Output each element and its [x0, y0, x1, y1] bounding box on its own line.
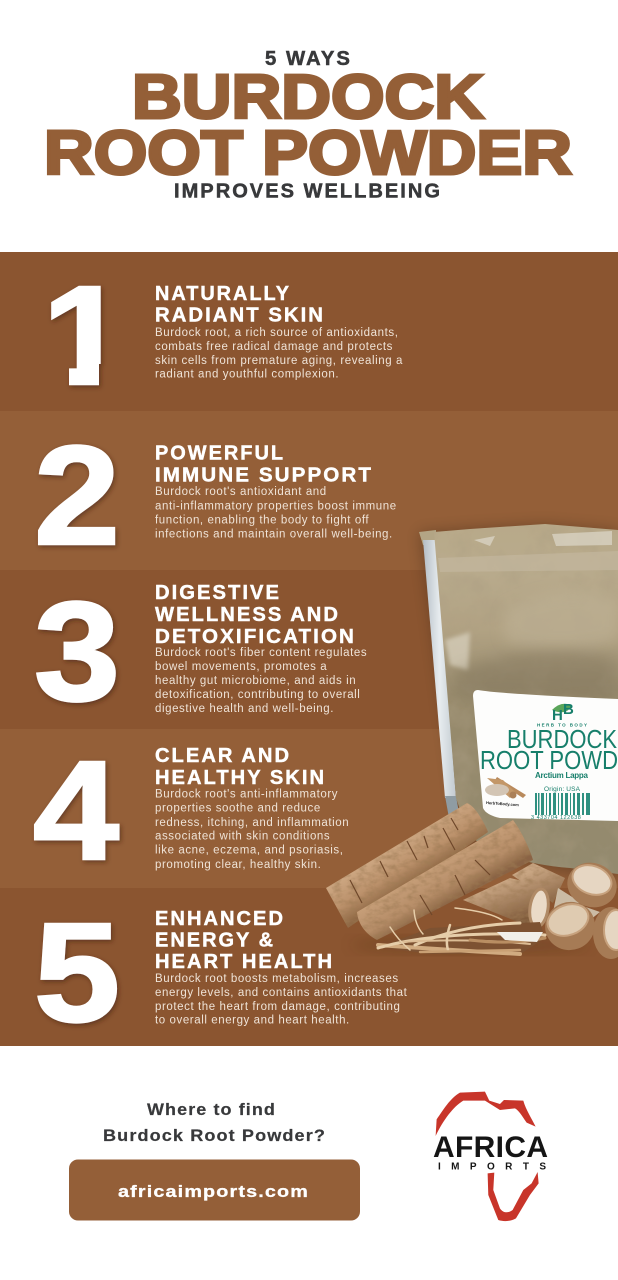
label website: HerbToBody.com: [486, 800, 519, 807]
heading: DIGESTIVE: [155, 582, 281, 604]
heading: ENHANCED: [155, 908, 285, 930]
body text: function, enabling the body to fight off: [155, 514, 369, 526]
title line: 5 ways: 5 WAYS: [265, 48, 352, 70]
label brand logo: B: [563, 701, 574, 718]
heading: DETOXIFICATION: [155, 626, 356, 648]
label brand logo: H: [552, 707, 563, 724]
section 5: [34, 893, 408, 1051]
section 4: [33, 731, 349, 889]
body text: radiant and youthful complexion.: [155, 368, 339, 380]
heading: ENERGY &: [155, 930, 275, 952]
body text: detoxification, contributing to overall: [155, 689, 360, 701]
bag foil lower shadow: [445, 796, 462, 830]
powder highlights: [505, 592, 618, 650]
panel: band 1 background: [0, 252, 618, 411]
root slices: [538, 856, 618, 959]
body text: Burdock root's fiber content regulates: [155, 647, 367, 659]
panel: band 2 background: [0, 411, 618, 570]
bag body: [434, 524, 618, 874]
number 3: 3: [34, 572, 120, 730]
heading: IMMUNE SUPPORT: [155, 464, 373, 486]
call to action button: africaimports.com: [118, 1182, 309, 1201]
body text: properties soothe and reduce: [155, 802, 321, 814]
heading: HEART HEALTH: [155, 951, 334, 973]
title line: root powder: ROOT POWDER: [44, 119, 572, 188]
number 1: 1: [42, 256, 128, 414]
heading: [155, 582, 356, 648]
zip seal: [438, 551, 618, 572]
body text: skin cells from premature aging, revealing a: [155, 355, 403, 367]
body text: associated with skin conditions: [155, 831, 330, 843]
label latin name: Arctium Lappa: [535, 771, 589, 780]
product image: powder bag: [419, 524, 618, 880]
body text: energy levels, and contains antioxidants that: [155, 987, 408, 999]
panel: band 5 background: [0, 888, 618, 1046]
title: [44, 48, 572, 202]
root cut end: [527, 888, 551, 928]
call to action text: Burdock Root Powder?: [103, 1127, 326, 1145]
body text: bowel movements, promotes a: [155, 661, 327, 673]
panel: band 4 background: [0, 729, 618, 888]
title line: improves wellbeing: IMPROVES WELLBEING: [174, 180, 442, 202]
body text: like acne, eczema, and psoriasis,: [155, 845, 344, 857]
body text: Burdock root boosts metabolism, increases: [155, 973, 399, 985]
heading: NATURALLY: [155, 283, 291, 305]
body text: digestive health and well-being.: [155, 703, 334, 715]
bag label: [473, 690, 618, 821]
call to action text: Where to find: [147, 1101, 276, 1119]
product image: burdock roots: [326, 803, 618, 959]
body text: Burdock root's antioxidant and: [155, 486, 327, 498]
bag tan back edge: [419, 530, 436, 545]
logo: Africa Imports: [433, 1092, 548, 1221]
body text: to overall energy and heart health.: [155, 1014, 350, 1026]
shredded root fibers: [378, 908, 545, 954]
label barcode: 3 433704 122638: [531, 815, 581, 821]
label origin: Origin: USA: [544, 786, 581, 793]
heading: WELLNESS AND: [155, 604, 340, 626]
label brand logo: HERB TO BODY: [537, 722, 587, 728]
large root front: [357, 820, 533, 940]
body text: redness, itching, and inflammation: [155, 817, 349, 829]
body text: protect the heart from damage, contributing: [155, 1001, 400, 1013]
root bark marks: [350, 818, 490, 915]
heading: POWERFUL: [155, 442, 285, 464]
section 3: [34, 572, 367, 730]
large root left: [326, 803, 488, 928]
number 2: 2: [34, 416, 120, 574]
heading: RADIANT SKIN: [155, 304, 325, 326]
call to action text: [103, 1101, 326, 1145]
number 4: 4: [33, 731, 119, 889]
heading: [155, 442, 373, 486]
number 5: 5: [34, 893, 120, 1051]
call to action button: [69, 1160, 360, 1220]
back root: [512, 863, 565, 903]
body text: anti-inflammatory properties boost immune: [155, 500, 397, 512]
heading: [155, 283, 325, 326]
body text: combats free radical damage and protects: [155, 341, 393, 353]
body text: promoting clear, healthy skin.: [155, 859, 321, 871]
root behind slices: [463, 878, 549, 928]
label barcode: [531, 793, 590, 821]
label brand logo: [537, 701, 587, 728]
body text: healthy gut microbiome, and aids in: [155, 675, 356, 687]
heading: CLEAR AND: [155, 745, 291, 767]
label mini roots picture: [485, 777, 526, 798]
section 2: [34, 416, 397, 574]
logo: Africa outline: [436, 1092, 539, 1221]
logo sub-wordmark: IMPORTS: [438, 1162, 546, 1172]
logo wordmark: AFRICA: [433, 1131, 548, 1164]
heading: HEALTHY SKIN: [155, 767, 326, 789]
title line: burdock: BURDOCK: [132, 63, 484, 132]
body text: Burdock root's anti-inflammatory: [155, 789, 338, 801]
body text: Burdock root, a rich source of antioxidants,: [155, 327, 398, 339]
bag foil edge: [423, 540, 456, 798]
heading: [155, 908, 334, 973]
body text: infections and maintain overall well-being.: [155, 528, 393, 540]
section 1: [50, 286, 402, 390]
heading: [155, 745, 326, 789]
panel: band 3 background: [0, 570, 618, 729]
